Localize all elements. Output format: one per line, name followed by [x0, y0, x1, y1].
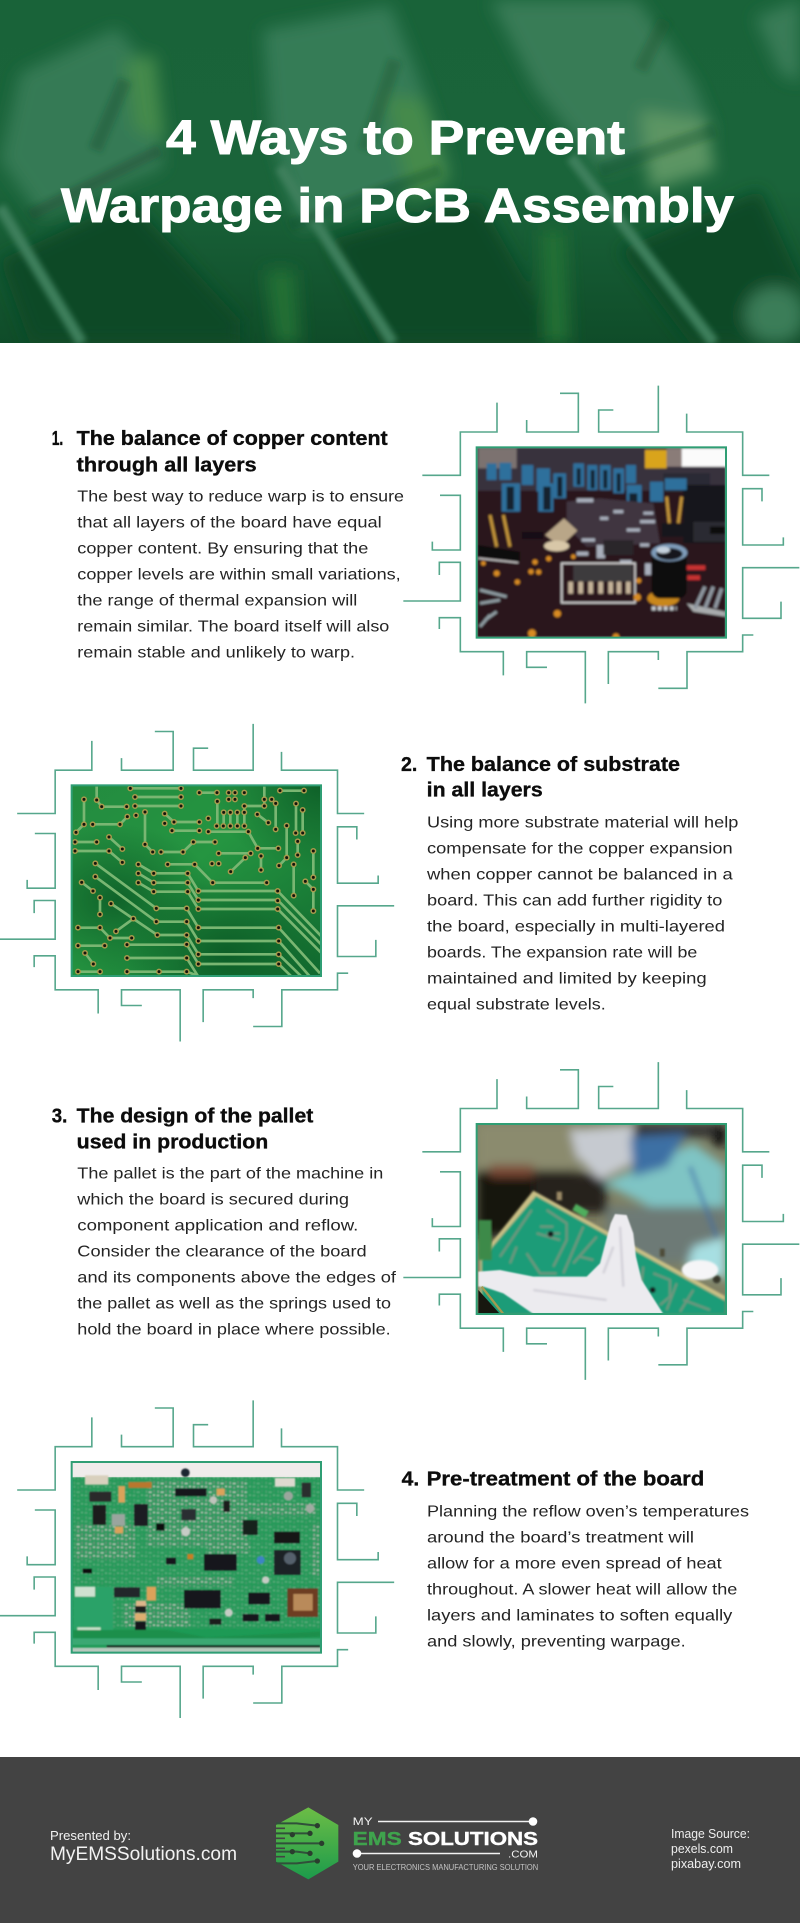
- heading: step 2: The balance of substrate: [427, 754, 680, 776]
- heading: step 1: through all layers: [77, 455, 257, 477]
- image sources: pexels.com: [671, 1841, 733, 1856]
- wordmark: .COM: [508, 1848, 538, 1860]
- circuit traces: [0, 1400, 394, 1718]
- circuit board: [480, 1191, 725, 1314]
- logo: [276, 1807, 538, 1879]
- heading: step 3: 3.: [52, 1105, 67, 1127]
- text block: step 3: Consider the clearance of the board: [77, 1243, 367, 1260]
- text block: step 2: board. This can add further rigidity to: [427, 892, 723, 909]
- text block: step 3: The pallet is the part of the machine in: [77, 1165, 383, 1182]
- heading: step 1: The balance of copper content: [77, 428, 388, 450]
- presented by: [50, 1828, 237, 1865]
- heading: step 4: Pre-treatment of the board: [427, 1469, 704, 1491]
- wordmark: [353, 1816, 538, 1872]
- text block: step 2: maintained and limited by keeping: [427, 970, 707, 987]
- text block: step 2: boards. The expansion rate will be: [427, 944, 697, 961]
- panel: step 1 copper balance: [52, 386, 799, 703]
- heading: step 2: 2.: [401, 754, 417, 776]
- heading: step 3: The design of the pallet: [77, 1105, 314, 1127]
- presented by: MyEMSSolutions.com: [50, 1844, 237, 1865]
- photo with circuit traces: step 3: [403, 1062, 799, 1380]
- text block: step 1: the range of thermal expansion will: [77, 593, 357, 610]
- board tracks: [75, 787, 322, 977]
- text block: step 4: and slowly, preventing warpage.: [427, 1634, 686, 1651]
- photo frame: [477, 1124, 726, 1314]
- text block: step 2: [426, 814, 739, 1013]
- heading: step 2: [401, 754, 680, 802]
- photo with circuit traces: step 2: [0, 724, 394, 1041]
- title: Warpage in PCB Assembly: [61, 180, 734, 233]
- wordmark: EMS: [353, 1828, 402, 1849]
- wordmark: YOUR ELECTRONICS MANUFACTURING SOLUTION: [353, 1863, 538, 1872]
- heading: step 3: [52, 1105, 314, 1153]
- text block: step 2: the board, especially in multi-layered: [427, 918, 725, 935]
- image sources: pixabay.com: [671, 1856, 741, 1871]
- footer background: [0, 1757, 800, 1923]
- photo: populated circuit board: [72, 1462, 321, 1653]
- text block: step 2: when copper cannot be balanced in a: [426, 866, 733, 883]
- heading: step 4: 4.: [402, 1469, 419, 1491]
- text block: step 3: the pallet as well as the springs used to: [77, 1295, 391, 1312]
- heading: step 1: [52, 428, 388, 477]
- title: 4 Ways to Prevent: [166, 112, 625, 165]
- text block: step 1: copper levels are within small variations,: [77, 567, 401, 584]
- text block: step 3: component application and reflow.: [77, 1217, 358, 1234]
- image sources: Image Source:: [671, 1826, 750, 1841]
- photo frame: [72, 785, 321, 976]
- circuit traces: [0, 724, 394, 1041]
- panel: step 2 substrate balance: [0, 724, 739, 1041]
- photo frame: [477, 447, 726, 638]
- heading: step 3: used in production: [77, 1131, 268, 1153]
- text block: step 3: hold the board in place where possible.: [77, 1321, 391, 1338]
- icon: hexagon circuit: [276, 1807, 338, 1879]
- text block: step 4: [427, 1504, 749, 1651]
- text block: step 2: equal substrate levels.: [427, 996, 606, 1013]
- text block: step 1: [77, 489, 404, 662]
- text block: step 4: Planning the reflow oven’s temperatures: [427, 1504, 749, 1521]
- title: [61, 112, 734, 233]
- heading: step 1: 1.: [52, 428, 63, 450]
- text block: step 1: The best way to reduce warp is to ensure: [77, 489, 404, 506]
- photo: bare green circuit board: [72, 785, 322, 977]
- heading: step 2: in all layers: [427, 780, 543, 802]
- photo: gloved hand holding board: [477, 1124, 726, 1314]
- text block: step 3: [76, 1165, 397, 1338]
- circuit traces: [403, 1062, 799, 1380]
- text block: step 3: and its components above the edges of: [77, 1269, 397, 1286]
- wordmark: MY: [353, 1816, 374, 1828]
- photo with circuit traces: step 4: [0, 1400, 394, 1718]
- header banner: [0, 0, 800, 343]
- panel: step 3 pallet design: [52, 1062, 799, 1380]
- banner photo background: [0, 0, 800, 343]
- text block: step 1: copper content. By ensuring that the: [77, 541, 368, 558]
- text block: step 2: Using more substrate material will help: [427, 814, 739, 831]
- panel: step 4 pre-treatment: [0, 1400, 749, 1718]
- wordmark: SOLUTIONS: [408, 1828, 538, 1849]
- text block: step 1: remain stable and unlikely to warp.: [77, 645, 355, 662]
- photo frame: [72, 1462, 321, 1653]
- text block: step 1: remain similar. The board itself will also: [77, 619, 390, 636]
- presented by: Presented by:: [50, 1828, 131, 1843]
- text block: step 4: layers and laminates to soften equally: [427, 1608, 733, 1625]
- photo: circuit board with capacitors: [477, 447, 726, 640]
- circuit traces: [403, 386, 799, 703]
- footer: [0, 1757, 800, 1923]
- photo with circuit traces: step 1: [403, 386, 799, 703]
- image sources: [671, 1826, 750, 1871]
- text block: step 2: compensate for the copper expansion: [427, 840, 733, 857]
- text block: step 4: throughout. A slower heat will allow the: [427, 1582, 737, 1599]
- text block: step 3: which the board is secured during: [76, 1191, 349, 1208]
- text block: step 4: allow for a more even spread of heat: [427, 1556, 722, 1573]
- text block: step 4: around the board’s treatment will: [427, 1530, 694, 1547]
- text block: step 1: that all layers of the board have equal: [77, 515, 382, 532]
- board pads: [75, 788, 313, 972]
- board pad holes: [75, 788, 313, 972]
